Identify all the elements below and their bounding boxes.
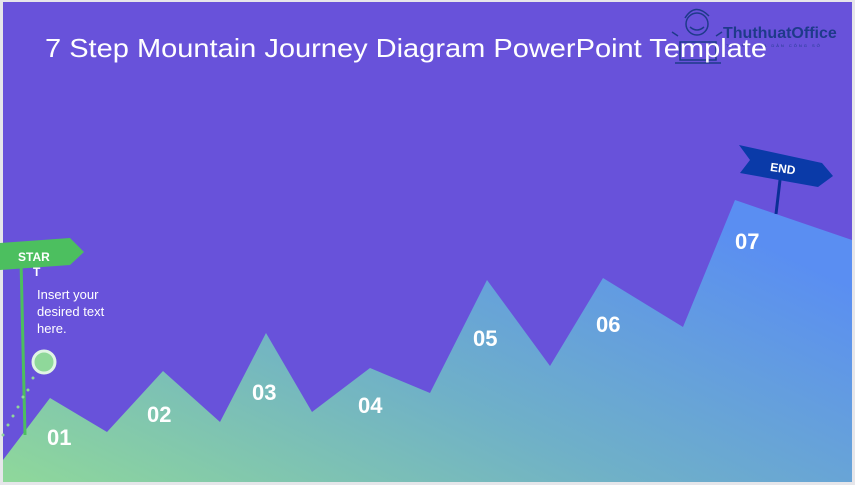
logo <box>672 9 837 63</box>
logo: ThuthuatOffice <box>723 25 837 42</box>
mountain <box>3 200 852 482</box>
start flag: STAR <box>18 250 50 264</box>
step numbers: 03 <box>252 380 276 405</box>
dotted path and circle marker <box>2 351 55 436</box>
text block: desired text <box>37 304 105 319</box>
icon: person at laptop <box>672 9 722 63</box>
step numbers: 04 <box>358 393 383 418</box>
text block: Insert your <box>37 287 99 302</box>
step numbers: 01 <box>47 425 71 450</box>
step numbers: 05 <box>473 326 497 351</box>
end flag <box>739 145 833 214</box>
text block: here. <box>37 321 67 336</box>
start flag: T <box>33 265 41 279</box>
title: 7 Step Mountain Journey Diagram PowerPoint Template <box>45 33 767 63</box>
step numbers: 07 <box>735 229 759 254</box>
step numbers: 06 <box>596 312 620 337</box>
step numbers <box>47 229 759 450</box>
start flag <box>0 238 84 435</box>
end flag: END <box>769 160 797 177</box>
logo: TRI KỶ CỦA DÂN CÔNG SỞ <box>726 43 822 48</box>
step numbers: 02 <box>147 402 171 427</box>
